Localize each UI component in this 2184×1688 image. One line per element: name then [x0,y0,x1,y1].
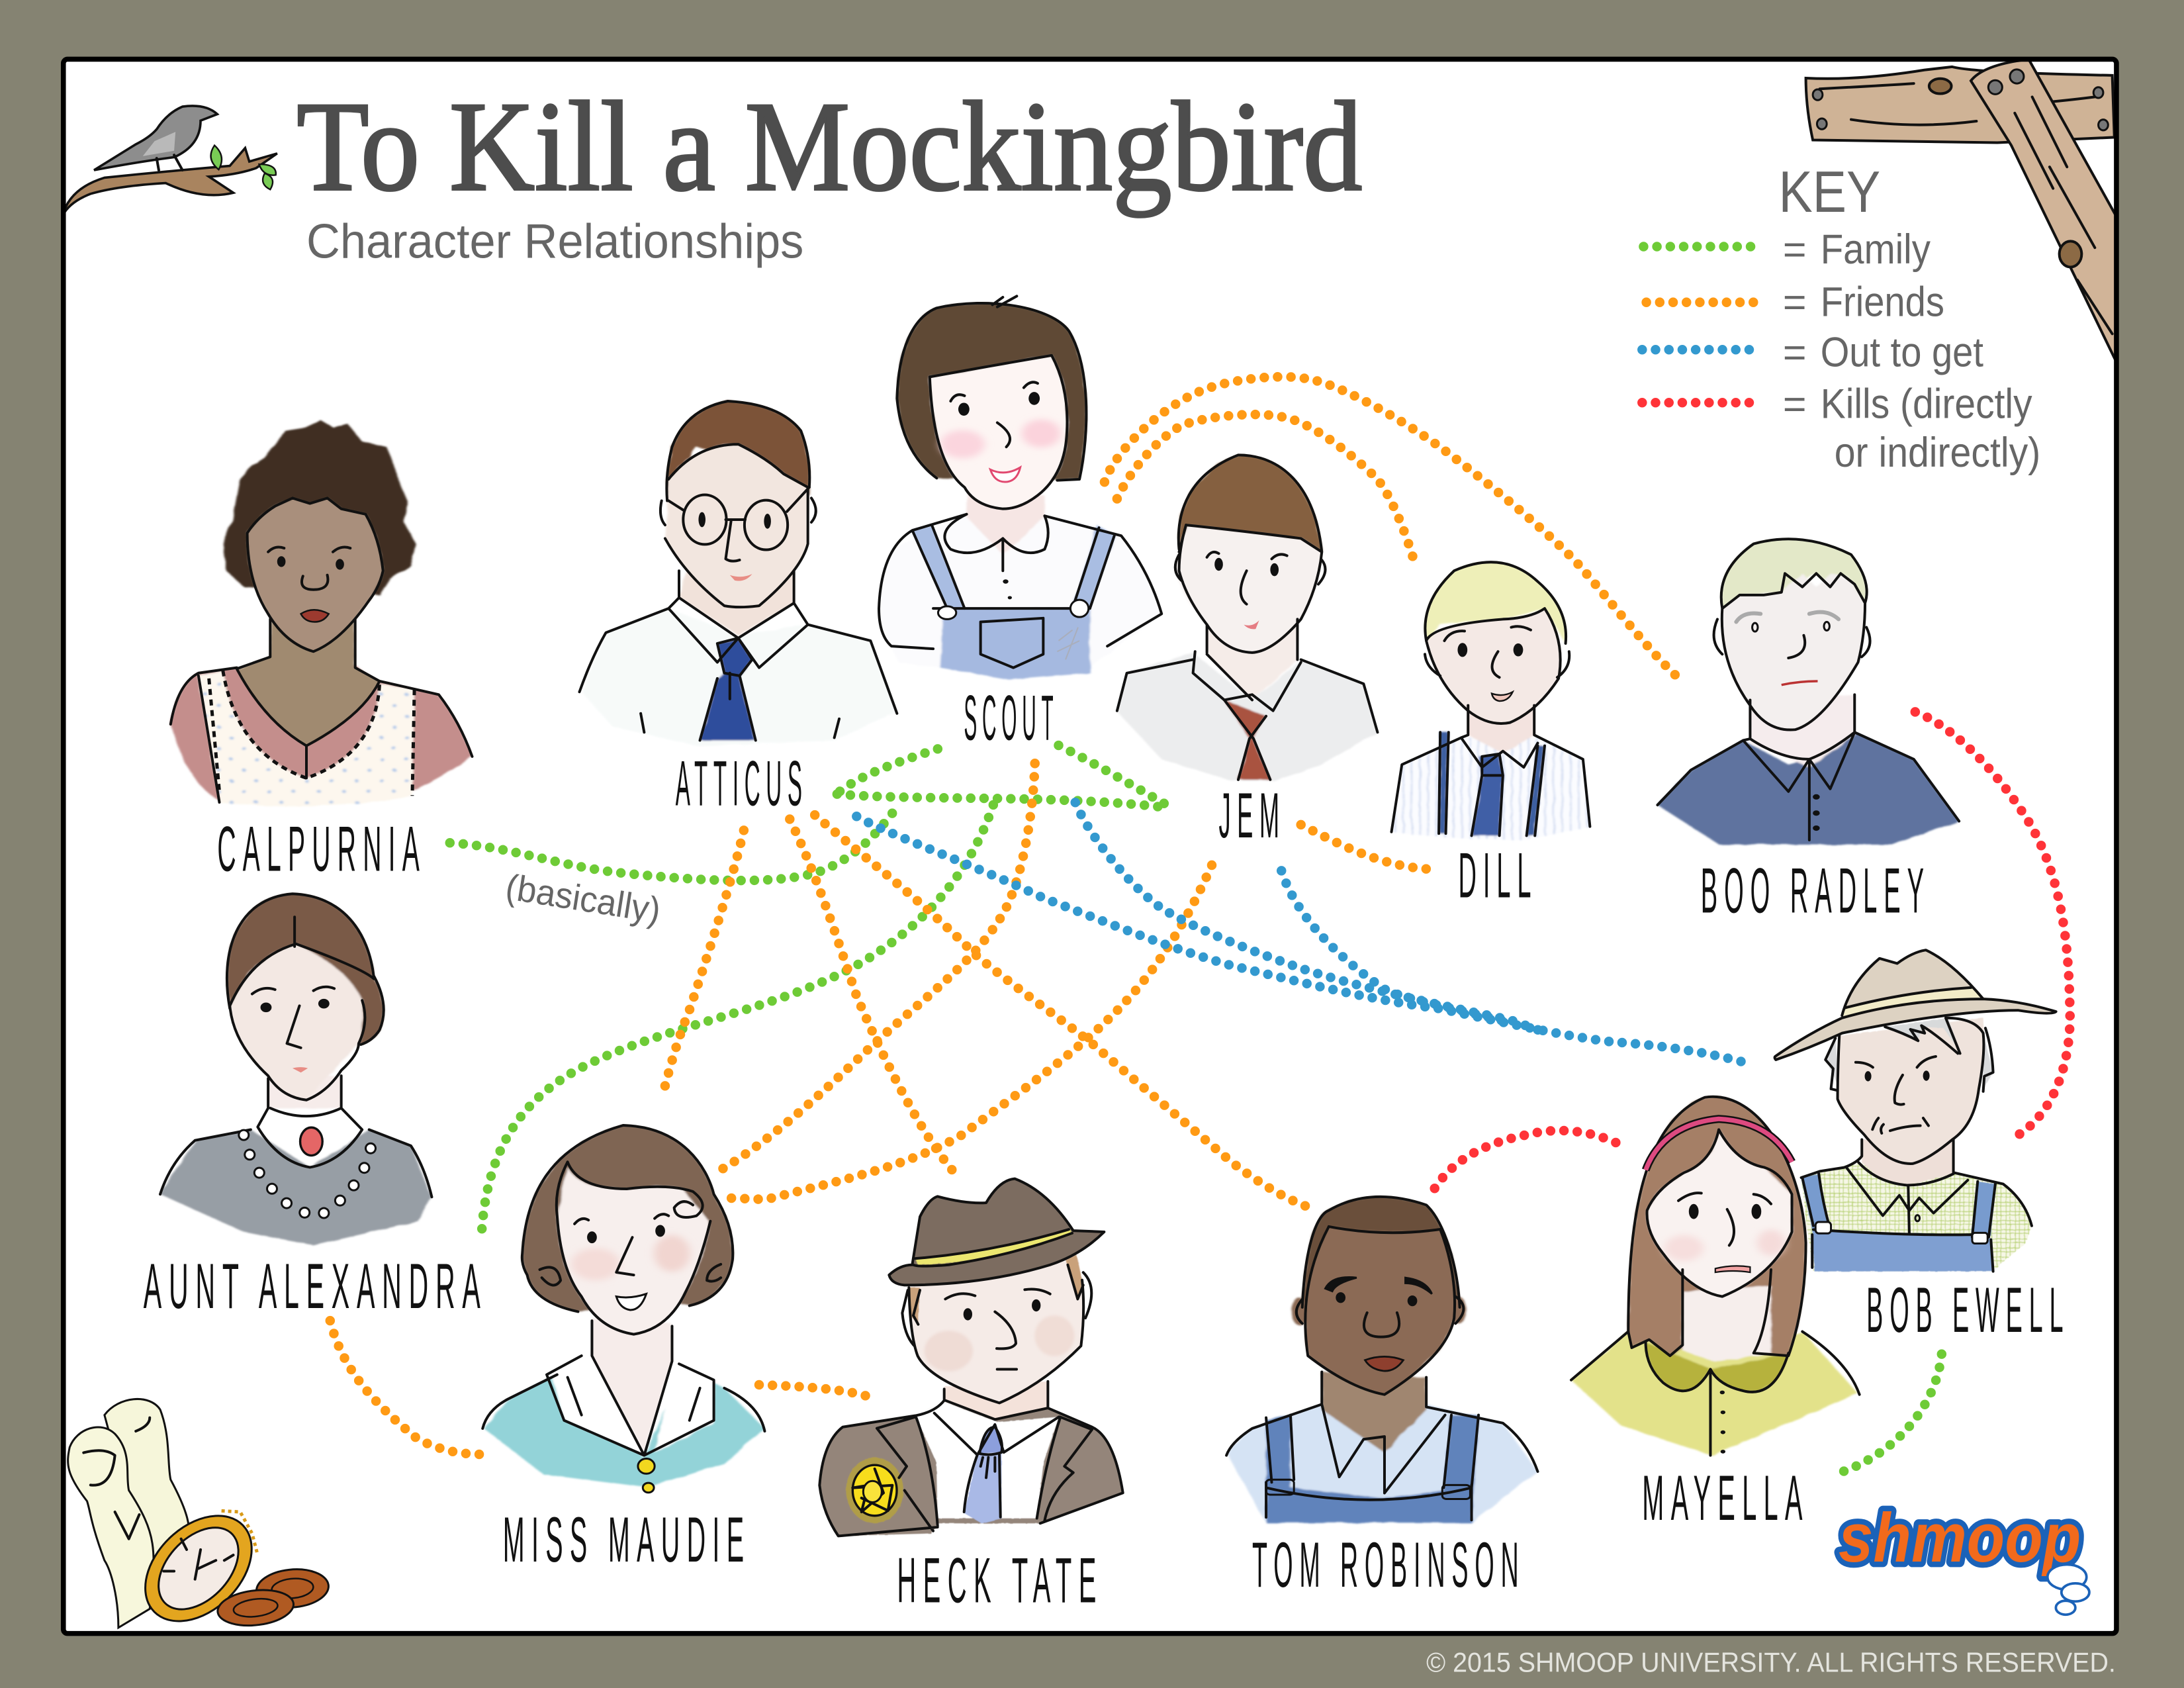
infographic canvas: ATTICUS [676,747,808,819]
connector: Bob to Mayella family line [1836,1354,1942,1474]
connector: Alexandra to Maudie friends line [330,1321,488,1454]
connector: Jem to Dill friends line [1301,825,1432,869]
infographic canvas: AUNT ALEXANDRA [144,1250,488,1322]
connector: Scout to Jem family line [1058,745,1167,805]
title: To Kill a Mockingbird [296,75,1362,217]
portrait: Heck Tate [819,1179,1123,1536]
legend row: kills: or indirectly) [1835,430,2040,476]
infographic canvas: CALPURNIA [217,812,426,884]
legend row: family: Family [1821,226,1931,273]
connector: Atticus to Jem family line [837,794,1170,808]
legend row: family [1643,226,1931,273]
infographic canvas: MISS MAUDIE [503,1503,751,1575]
infographic canvas: MAYELLA [1642,1462,1809,1534]
legend row: kills: = [1783,381,1807,426]
logo: shmoop [1839,1499,2089,1615]
icon: mockingbird on branch [63,106,277,215]
infographic canvas: DILL [1459,839,1537,911]
label: basically: (basically) [503,866,663,931]
portrait: Dill [1391,562,1590,840]
connector: Aunt Alexandra family line [482,797,996,1229]
legend: key [1642,159,2040,476]
connector: Bob kills Tom, red line [1435,1131,1624,1188]
connector: Scout to Maudie friends line [720,763,1035,1170]
icon: wooden sign [1806,59,2116,361]
portrait: Aunt Alexandra [160,894,432,1245]
infographic canvas: SCOUT [964,682,1058,754]
subtitle: Character Relationships [306,213,803,268]
infographic canvas: JEM [1219,779,1286,851]
legend row: family: = [1783,227,1807,272]
legend row: friends: Friends [1821,279,1944,326]
portrait: Miss Maudie [482,1125,764,1493]
legend row: friends [1647,279,1944,326]
legend row: out to get: Out to get [1821,330,1983,376]
connector: Atticus to Tom friends line [815,815,1315,1209]
icon: soap dolls, pocket watch and coins [68,1399,332,1635]
portrait: Boo Radley [1657,539,1959,844]
legend heading: KEY [1779,159,1880,224]
portrait: Bob Ewell [1775,950,2056,1272]
portrait: Atticus [580,401,897,746]
connector: Maudie to Heck friends line [759,1385,866,1396]
connector: Calpurnia family line [450,805,898,880]
legend row: kills [1642,381,2040,476]
connector: Atticus out to get Bob [856,816,1747,1063]
legend row: out to get [1642,330,1983,376]
connector: Jem to Maudie friends line [731,865,1212,1199]
portrait: Tom Robinson [1226,1197,1537,1523]
portrait: Jem [1116,455,1377,780]
infographic canvas: TOM ROBINSON [1252,1528,1525,1601]
connector: Jem out to get Bob [1281,870,1510,1023]
connector: Scout to Dill friends line [1117,414,1414,560]
logo: shmoop: shmoop [1839,1499,2081,1577]
connector: Atticus to Heck friends line [790,819,960,1178]
legend row: out to get: = [1783,330,1807,375]
legend row: friends: = [1783,280,1807,325]
connector: Scout out to get Bob [1075,802,1545,1032]
legend row: kills: Kills (directly [1821,381,2032,427]
copyright: © 2015 SHMOOP UNIVERSITY. ALL RIGHTS RESERVED. [1426,1647,2116,1678]
portrait: Mayella [1571,1097,1860,1456]
connector: Boo kills Bob, red line [1915,712,2070,1140]
connector: Scout to Boo friends line [1105,377,1682,681]
connector: Atticus to Maudie friends line [663,830,744,1094]
infographic canvas: HECK TATE [897,1544,1103,1616]
connector: Atticus to Scout family line [840,748,940,791]
portrait: Scout [879,296,1161,680]
portrait: Calpurnia [171,420,472,806]
